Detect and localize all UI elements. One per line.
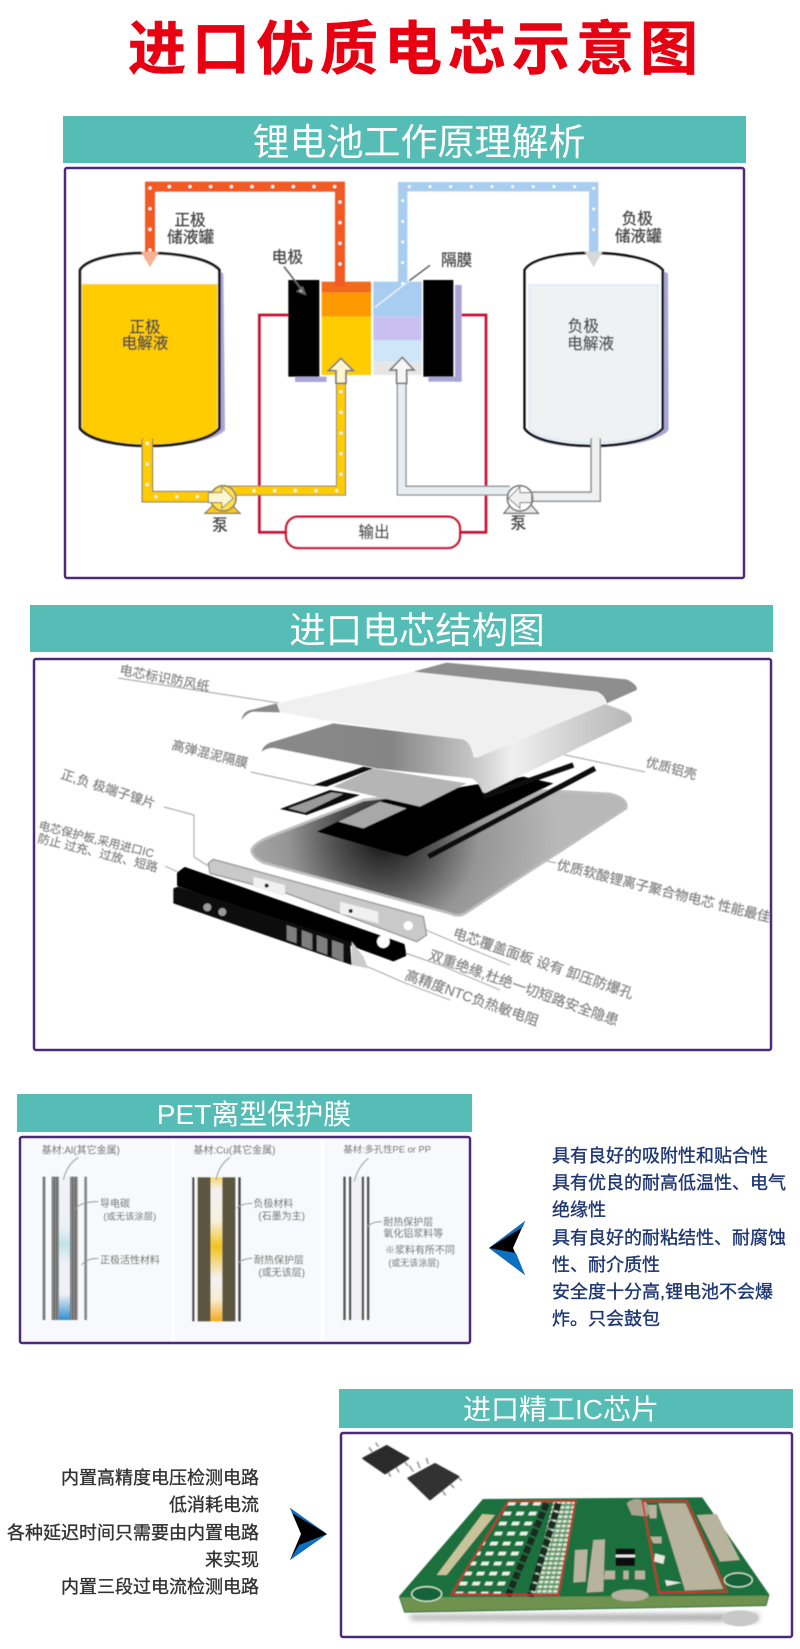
board shadow bbox=[408, 1613, 758, 1622]
structure labels: 防止 过充、过放、短路 bbox=[36, 830, 160, 875]
chip one bbox=[363, 1443, 408, 1477]
top wrap sheet bbox=[242, 672, 605, 758]
blue pipe bbox=[403, 187, 603, 287]
structure labels: 高弹混泥隔膜 bbox=[170, 737, 250, 771]
panel: flow battery diagram bbox=[65, 168, 744, 578]
component rows bbox=[508, 1503, 558, 1597]
text: PET benefits bbox=[552, 1146, 786, 1329]
diagram labels: 正极 bbox=[129, 318, 161, 336]
text: IC benefits: 内置高精度电压检测电路 bbox=[61, 1468, 259, 1488]
diagram labels: 负极 bbox=[568, 318, 599, 336]
cover plate bbox=[208, 859, 427, 942]
black cell core bbox=[317, 777, 553, 857]
mount holes bbox=[412, 1573, 752, 1601]
diagram labels: 负极 bbox=[622, 210, 653, 228]
structure labels: 正,负 极端子镍片 bbox=[59, 767, 157, 811]
structure labels: 电芯标识防风纸 bbox=[118, 662, 211, 694]
text: PET benefits: 安全度十分高,锂电池不会爆 bbox=[552, 1282, 773, 1302]
heading: cell structure bbox=[30, 605, 773, 652]
heading: PET film bbox=[17, 1094, 472, 1132]
panel: exploded battery structure bbox=[34, 659, 772, 1050]
board bbox=[400, 1498, 768, 1612]
text: PET benefits: 具有良好的吸附性和贴合性 bbox=[552, 1146, 768, 1166]
text: IC benefits bbox=[7, 1468, 259, 1597]
layer labels: 基材:多孔性PE or PP bbox=[343, 1144, 431, 1155]
diagram labels: 电解液 bbox=[122, 334, 169, 352]
structure labels bbox=[36, 662, 772, 1029]
layers separator bbox=[343, 1177, 369, 1320]
panel: PET film layers bbox=[20, 1137, 470, 1343]
right tank bbox=[525, 253, 669, 447]
chip two bbox=[408, 1458, 462, 1499]
layer labels: 耐热保护层 bbox=[383, 1215, 433, 1228]
layer leaders bbox=[63, 1157, 382, 1265]
layer labels: 基材:Al(其它金属) bbox=[42, 1143, 120, 1156]
text: PET benefits: 性、耐介质性 bbox=[552, 1255, 660, 1275]
silver traces bbox=[573, 1499, 740, 1593]
heading: IC chip: 进口精工IC芯片 bbox=[463, 1394, 659, 1425]
pump right bbox=[504, 486, 538, 513]
separator pointer line bbox=[409, 265, 430, 281]
edge connector bbox=[437, 1514, 495, 1575]
text: PET benefits: 具有良好的耐粘结性、耐腐蚀 bbox=[552, 1228, 786, 1248]
panel: IC chip board bbox=[341, 1433, 792, 1637]
structure labels: 电芯保护板,采用进口IC bbox=[37, 818, 155, 861]
top wrap lip bbox=[242, 703, 280, 720]
structure labels: 优质软酸锂离子聚合物电芯 性能最佳 bbox=[555, 856, 772, 925]
layer labels: (或无该涂层) bbox=[388, 1257, 439, 1268]
leader lines bbox=[118, 678, 645, 1000]
text: IC benefits: 内置三段过电流检测电路 bbox=[61, 1577, 259, 1597]
diagram labels: 电极 bbox=[272, 248, 303, 266]
layers aluminium bbox=[43, 1177, 87, 1320]
layer labels: 氧化铝浆料等 bbox=[383, 1227, 443, 1240]
MOSFETs bbox=[616, 1549, 635, 1566]
left tank bbox=[80, 253, 225, 447]
pump left bbox=[205, 486, 240, 513]
structure labels: 高精度NTC负热敏电阻 bbox=[403, 967, 541, 1029]
layer labels: 耐热保护层 bbox=[254, 1254, 304, 1267]
text: PET benefits: 具有优良的耐高低温性、电气 bbox=[552, 1173, 786, 1193]
terminal nickel tabs bbox=[280, 790, 360, 815]
corner watermark bbox=[722, 1610, 758, 1626]
diagram labels: 电解液 bbox=[567, 335, 614, 353]
diagram labels: 正极 bbox=[174, 212, 206, 230]
solder spots bbox=[654, 1553, 682, 1586]
red highlight boxes bbox=[452, 1501, 727, 1595]
layer labels: ※浆料有所不同 bbox=[385, 1244, 455, 1257]
layer labels: (或无该层) bbox=[258, 1266, 305, 1279]
structure labels: 优质铝壳 bbox=[644, 754, 698, 782]
diagram labels bbox=[122, 210, 662, 541]
protection board bbox=[173, 868, 405, 968]
layer labels: 负极材料 bbox=[253, 1197, 293, 1210]
diagram labels: 隔膜 bbox=[441, 252, 472, 270]
layer labels: 正极活性材料 bbox=[100, 1254, 160, 1267]
top wrap strip bbox=[413, 663, 637, 703]
gray pipe bbox=[390, 357, 596, 497]
text: IC benefits: 低消耗电流 bbox=[169, 1495, 259, 1515]
layer labels: (石墨为主) bbox=[258, 1210, 305, 1222]
diagram labels: 储液罐 bbox=[167, 229, 214, 247]
layer labels: 基材:Cu(其它金属) bbox=[193, 1143, 275, 1156]
diagram labels: 泵 bbox=[212, 518, 228, 535]
arrow: pointing to IC panel bbox=[290, 1508, 327, 1560]
separator tabs bbox=[313, 767, 373, 787]
SMD area bbox=[452, 1502, 547, 1594]
switch bbox=[611, 1589, 649, 1601]
orange pipe bbox=[141, 187, 340, 287]
title: 进口优质电芯示意图 bbox=[128, 17, 704, 82]
SMD area right bbox=[530, 1502, 575, 1594]
yellow pipe bbox=[147, 358, 353, 497]
text: PET benefits: 绝缘性 bbox=[552, 1200, 606, 1220]
board edge bbox=[400, 1596, 768, 1612]
aluminium shell lower bbox=[262, 704, 632, 793]
heading: working principle bbox=[63, 116, 746, 163]
red output circuit bbox=[259, 315, 486, 548]
cell tray bbox=[252, 787, 626, 915]
arrow: pointing to PET panel bbox=[489, 1221, 525, 1275]
heading: working principle: 锂电池工作原理解析 bbox=[252, 122, 586, 163]
column dividers bbox=[173, 1140, 322, 1340]
cell tab bbox=[338, 802, 407, 828]
text: IC benefits: 来实现 bbox=[205, 1550, 259, 1570]
electrode pointer bbox=[284, 267, 305, 294]
diagram labels: 泵 bbox=[511, 515, 527, 532]
layer labels: (或无该涂层) bbox=[103, 1210, 156, 1221]
cell stack bbox=[288, 280, 462, 382]
heading: IC chip bbox=[339, 1389, 793, 1428]
layer labels: 导电碳 bbox=[100, 1197, 130, 1210]
separator sheet bbox=[333, 768, 467, 807]
diagram labels: 输出 bbox=[358, 523, 390, 541]
layer labels bbox=[42, 1143, 455, 1279]
layers copper bbox=[192, 1177, 241, 1321]
structure labels: 电芯覆盖面板 设有 卸压防爆孔 bbox=[451, 925, 636, 1002]
text: IC benefits: 各种延迟时间只需要由内置电路 bbox=[7, 1523, 259, 1543]
heading: cell structure: 进口电芯结构图 bbox=[289, 610, 545, 651]
diagram labels: 储液罐 bbox=[615, 227, 662, 245]
text: PET benefits: 炸。只会鼓包 bbox=[552, 1309, 660, 1329]
cell strips bbox=[428, 765, 595, 857]
structure labels: 双重绝缘,杜绝一切短路安全隐患 bbox=[427, 947, 621, 1029]
heading: PET film: PET离型保护膜 bbox=[157, 1099, 351, 1130]
separator pointer bbox=[375, 283, 407, 307]
